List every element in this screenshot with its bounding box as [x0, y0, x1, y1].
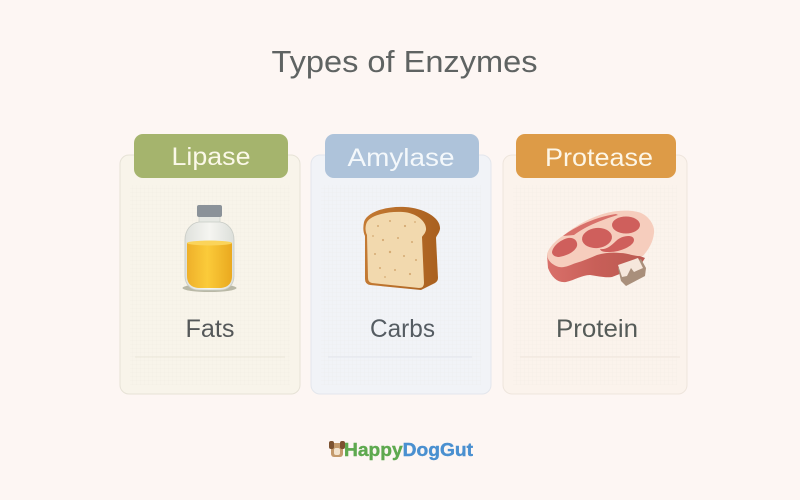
protease header: Protease: [545, 144, 653, 172]
logo: HappyDogGut: [329, 440, 473, 460]
label: carbs: Carbs: [370, 315, 435, 343]
panel: lipase: [120, 134, 300, 394]
icon: oil bottle: [182, 205, 236, 292]
icon: dog face: [329, 441, 345, 457]
lipase card background: [120, 155, 300, 394]
panel: amylase: [311, 134, 491, 394]
label: fats: Fats: [186, 315, 234, 343]
label: protein: Protein: [556, 315, 638, 343]
brand name: HappyDogGut: [344, 440, 473, 460]
title: Types of Enzymes: [272, 44, 538, 79]
icon: bread: [363, 207, 440, 290]
protease header: [516, 134, 676, 178]
amylase header: [325, 134, 479, 178]
icon: steak: [547, 211, 654, 286]
lipase header: Lipase: [172, 143, 250, 171]
protease card background: [503, 155, 687, 394]
panel: protease: [503, 134, 687, 394]
lipase header: [134, 134, 288, 178]
amylase card background: [311, 155, 491, 394]
amylase header: Amylase: [348, 144, 454, 172]
